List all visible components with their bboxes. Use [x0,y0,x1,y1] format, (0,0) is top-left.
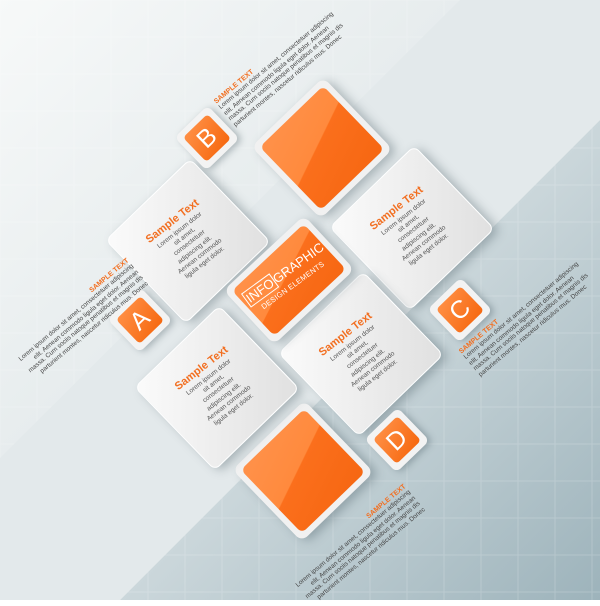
text B: massa. Cum sociis natoque penatibus et magnis dis [227,22,345,122]
center title plate [224,215,354,345]
text B: SAMPLE TEXT [213,68,255,105]
card: top-left: consectetuer [173,229,207,258]
badge A [107,287,173,353]
text D: SAMPLE TEXT [365,483,407,520]
text C: SAMPLE TEXT [458,318,500,355]
badge B: B [191,122,223,154]
card: top-left: Aenean commodo [177,237,223,275]
card: bottom-right: sit amet, [346,339,370,360]
text D: Lorem ipsum dolor sit amet, consectetuer adipiscing [295,489,412,589]
card: top-left [105,158,271,324]
card: top-left: ligula eget dolor. [184,245,226,280]
badge C [427,277,493,343]
card: bottom-right: Aenean commodo [350,350,396,388]
text C: parturient montes, nascetur ridiculus mus. Donec [477,283,588,378]
card: bottom-right [278,271,444,437]
card: bottom-left: ligula eget dolor. [213,392,255,427]
card: bottom-left [134,305,300,471]
badge D: D [381,424,413,456]
card: bottom-right: consectetuer [346,342,380,371]
badge C: C [444,294,476,326]
center title plate: DESIGN ELEMENTS [260,259,326,311]
text C: Lorem ipsum dolor sit amet, consectetuer adipiscing [463,261,580,361]
badge A: A [124,304,156,336]
card: bottom-right: Lorem ipsum dolor [329,324,376,363]
card: bottom-left: sit amet, [202,373,226,394]
text A: parturient montes, nascetur ridiculus mus. Donec [39,280,149,375]
card: bottom-right: Sample Text [317,310,375,359]
text D: massa. Cum sociis natoque penatibus et magnis dis [304,500,422,600]
card: bottom-right: adipiscing elit. [349,347,386,378]
text D: parturient montes, nascetur ridiculus mus. Donec [316,506,426,601]
card: top-left: sit amet, [173,226,197,247]
orange square top [251,77,393,219]
card: top-right: Aenean commodo [401,224,447,262]
card: top-left: Sample Text [144,197,202,246]
card: top-right: Sample Text [368,184,426,233]
text C: massa. Cum sociis natoque penatibus et magnis dis [472,272,590,372]
orange square bottom [232,400,374,542]
badge D [364,407,430,473]
center title plate: INFOGRAPHIC [243,239,327,306]
text A: massa. Cum sociis natoque penatibus et magnis dis [27,274,145,374]
card: bottom-left: Aenean commodo [206,384,252,422]
card: top-right [329,145,495,311]
card: bottom-left: consectetuer [202,376,236,405]
card: top-left: adipiscing elit. [176,234,213,265]
card: top-right: ligula eget dolor. [408,232,450,267]
text B: elit. Aenean commodo ligula eget dolor. Aenean [223,25,330,117]
card: bottom-left: adipiscing elit. [205,381,242,412]
card: top-right: consectetuer [397,216,431,245]
text A: SAMPLE TEXT [88,257,130,294]
card: top-right: sit amet, [397,213,421,234]
card: top-left: Lorem ipsum dolor [156,211,203,250]
card: top-right: adipiscing elit. [400,221,437,252]
text A: elit. Aenean commodo ligula eget dolor. Aenean [32,269,140,361]
text C: elit. Aenean commodo ligula eget dolor. Aenean [468,275,575,367]
card: bottom-right: ligula eget dolor. [357,358,399,393]
card: bottom-left: Sample Text [173,344,231,393]
card: bottom-left: Lorem ipsum dolor [185,358,232,397]
text D: elit. Aenean commodo ligula eget dolor. Aenean [309,495,417,587]
badge B [174,105,240,171]
card: top-right: Lorem ipsum dolor [380,198,427,237]
text B: Lorem ipsum dolor sit amet, consectetuer adipiscing [218,11,335,111]
text A: Lorem ipsum dolor sit amet, consectetuer adipiscing [18,263,135,363]
text B: parturient montes, nascetur ridiculus mus. Donec [232,33,343,128]
